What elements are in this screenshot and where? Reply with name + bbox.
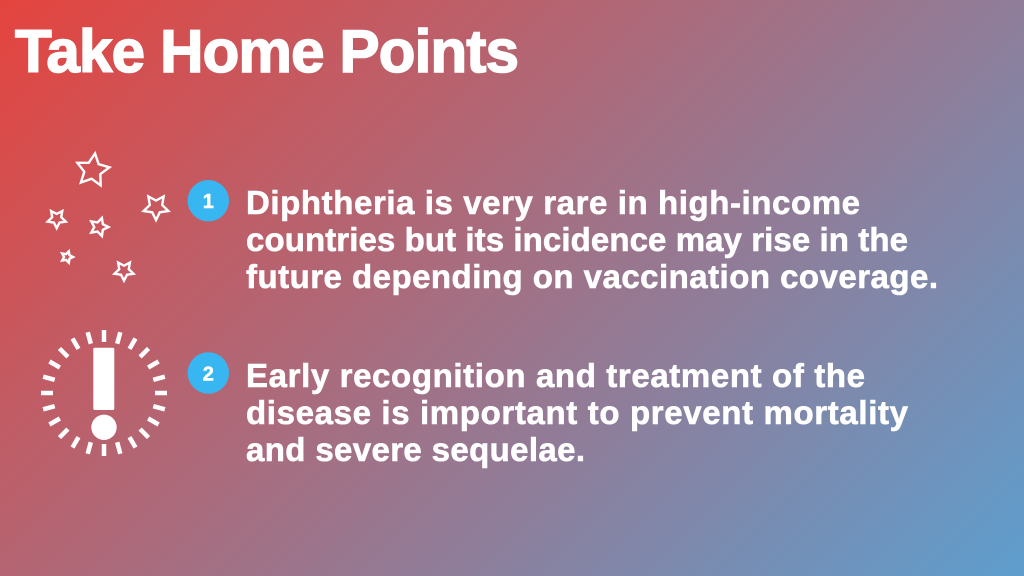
icon: stars [48,151,168,281]
badge: number 2: 2 [203,363,214,385]
badge: number 2 [188,352,229,394]
text: point 2: Early recognition and treatment of the [246,357,865,394]
icon: exclamation mark with rays [41,330,167,456]
title: Take Home Points [15,18,519,85]
text: point 1: future depending on vaccination coverage. [246,258,938,295]
text: point 1: countries but its incidence may rise in the [246,221,908,258]
text: point 1 [246,184,938,295]
text: point 2: and severe sequelae. [246,431,585,468]
text: point 2: disease is important to prevent mortality [246,394,909,431]
badge: number 1 [188,180,229,221]
badge: number 1: 1 [203,191,214,213]
text: point 1: Diphtheria is very rare in high-income [246,184,860,221]
text: point 2 [246,357,909,468]
